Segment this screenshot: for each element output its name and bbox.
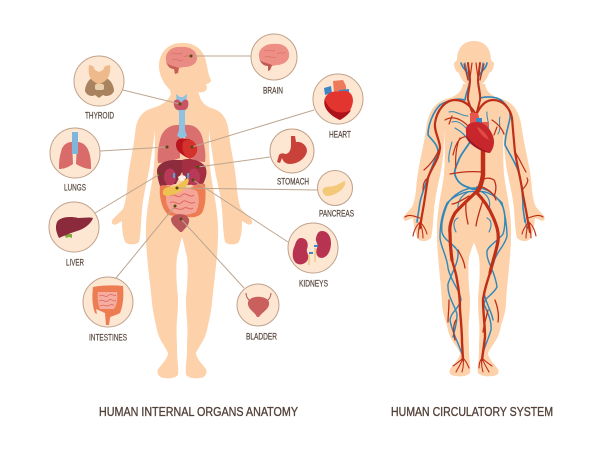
- foot branches: [453, 358, 492, 372]
- label: pancreas: PANCREAS: [319, 208, 354, 220]
- title: circulatory system: HUMAN CIRCULATORY SYSTEM: [391, 404, 553, 419]
- panel: circulatory figure: [403, 41, 545, 376]
- callout: brain: [251, 34, 297, 96]
- icon: stomach: [277, 136, 307, 164]
- organ: pancreas: [163, 178, 189, 196]
- organ: liver: [157, 160, 182, 186]
- callout: intestines: [83, 277, 133, 344]
- icon: thyroid: [85, 65, 114, 98]
- head profile: [159, 43, 211, 100]
- icon: liver: [56, 217, 93, 238]
- organ: small vessels: [173, 173, 189, 181]
- organ: kidneys: [164, 168, 200, 186]
- icon: lungs: [59, 132, 91, 169]
- callout: pancreas: [318, 170, 354, 220]
- title: internal organs: HUMAN INTERNAL ORGANS ANATOMY: [99, 404, 298, 419]
- connector lines: [95, 56, 318, 288]
- icon: brain: [259, 44, 289, 71]
- panel: internal organs figure: [112, 43, 252, 378]
- callout: thyroid: [74, 56, 124, 122]
- callout: kidneys: [288, 223, 338, 290]
- connector dots: [158, 54, 200, 220]
- label: thyroid: THYROID: [85, 110, 114, 122]
- label: stomach: STOMACH: [277, 176, 309, 188]
- label: lungs: LUNGS: [64, 182, 86, 194]
- body silhouette: [112, 90, 252, 378]
- hand branches: [405, 215, 543, 238]
- callout: stomach: [270, 129, 314, 188]
- organ: brain: [166, 47, 197, 74]
- organ: right lung: [185, 125, 205, 162]
- icon: intestines: [92, 285, 123, 325]
- organ: stomach: [182, 159, 206, 185]
- organ: thyroid: [174, 100, 188, 110]
- callout: liver: [49, 202, 99, 268]
- label: intestines: INTESTINES: [89, 332, 127, 344]
- body silhouette: [403, 41, 545, 376]
- organ: trachea: [176, 94, 187, 138]
- callout: bladder: [237, 284, 279, 342]
- icon: pancreas: [323, 181, 345, 196]
- icon: central heart: [466, 113, 494, 153]
- veins: [417, 63, 527, 356]
- head: [454, 41, 494, 88]
- arteries: [405, 63, 543, 372]
- label: bladder: BLADDER: [246, 332, 277, 342]
- organ: large intestine: [160, 184, 206, 217]
- organ: heart: [176, 138, 197, 159]
- icon: kidneys: [293, 231, 331, 265]
- callout: lungs: [50, 128, 100, 194]
- label: heart: HEART: [329, 130, 351, 140]
- label: brain: BRAIN: [263, 86, 283, 96]
- callout: heart: [313, 74, 363, 140]
- label: kidneys: KIDNEYS: [299, 278, 328, 290]
- organ: bladder: [171, 214, 189, 232]
- icon: bladder: [246, 293, 271, 317]
- organ: small intestine: [166, 188, 199, 215]
- label: liver: LIVER: [66, 258, 84, 268]
- icon: heart: [324, 80, 353, 120]
- organ: left lung: [158, 125, 180, 163]
